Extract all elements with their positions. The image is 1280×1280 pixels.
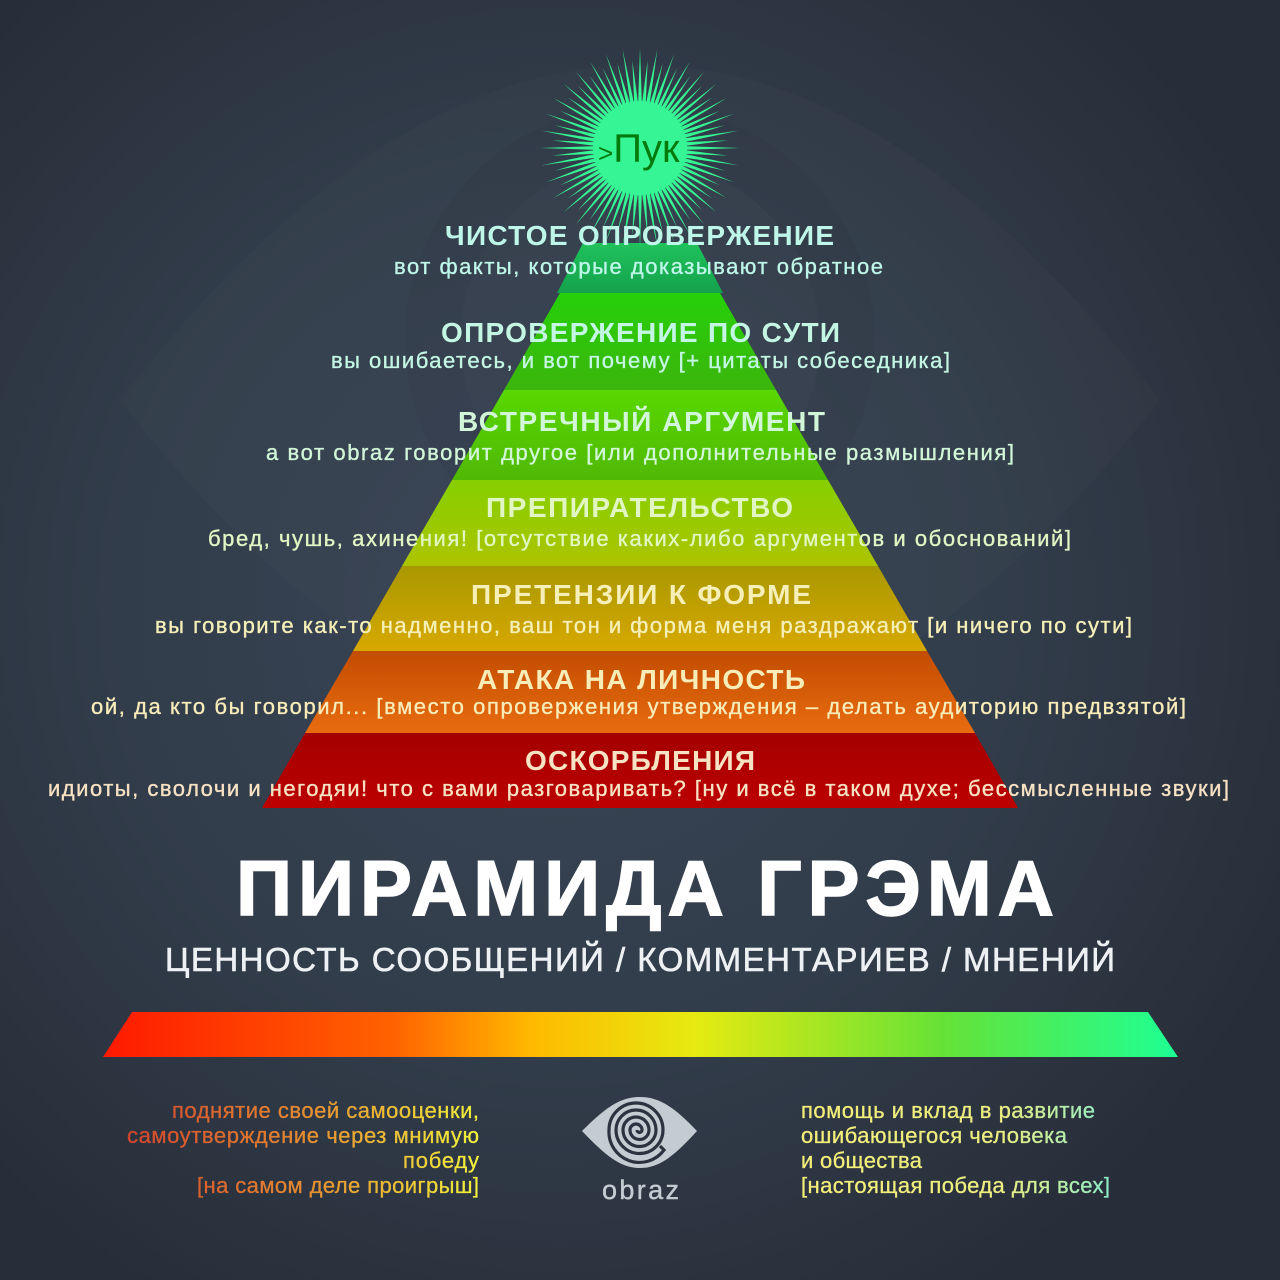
level 4 text [208,492,1071,551]
right note: ошибающегося человека [801,1123,1068,1148]
subtitle: ЦЕННОСТЬ СООБЩЕНИЙ / КОММЕНТАРИЕВ / МНЕНИЙ [165,941,1115,978]
level 1 text [394,220,883,279]
watermark: large eye behind the pyramid [120,65,1160,735]
level 5 text: ПРЕТЕНЗИИ К ФОРМЕ [471,579,811,610]
level 7 text [48,745,1229,801]
band: personal attack [305,651,975,733]
level 7 text: ОСКОРБЛЕНИЯ [525,745,755,776]
level 7 text: идиоты, сволочи и негодяи! что с вами разговаривать? [ну и всё в таком духе; бессмысленные звуки] [48,776,1229,801]
level 5 text [155,579,1132,638]
right note [801,1098,1110,1198]
band: refutation of the point [504,293,776,390]
level 2 text [331,317,950,373]
level 4 text: бред, чушь, ахинения! [отсутствие каких-либо аргументов и обоснований] [208,526,1071,551]
level 6 text [91,664,1186,719]
left note: самоутверждение через мнимую [127,1123,479,1148]
level 2 text: ОПРОВЕРЖЕНИЕ ПО СУТИ [441,317,840,348]
level 5 text: вы говорите как-то надменно, ваш тон и форма меня раздражают [и ничего по сути] [155,613,1132,638]
level 3 text: а вот obraz говорит другое [или дополнительные размышления] [266,440,1014,465]
left note: поднятие своей самооценки, [172,1098,479,1123]
level 1 text: ЧИСТОЕ ОПРОВЕРЖЕНИЕ [445,220,834,251]
band: insults [262,733,1018,808]
right note: и общества [801,1148,923,1173]
level 2 text: вы ошибаетесь, и вот почему [+ цитаты собеседника] [331,348,950,373]
level 3 text [266,405,1014,465]
title: ПИРАМИДА ГРЭМА [236,844,1054,932]
band: counterargument [452,390,828,480]
right note: [настоящая победа для всех] [801,1173,1110,1198]
right note: помощь и вклад в развитие [801,1098,1095,1123]
gradient scale bar [103,1012,1178,1057]
icon: sun burst at the apex [527,38,748,260]
level 4 text: ПРЕПИРАТЕЛЬСТВО [486,492,793,523]
left note: [на самом деле проигрыш] [197,1173,479,1198]
pyramid [262,243,1018,808]
left note [127,1098,479,1198]
band: contradiction [402,480,878,566]
band: form complaints [353,566,927,651]
logo: eye with spiral [582,1097,697,1168]
level 3 text: ВСТРЕЧНЫЙ АРГУМЕНТ [458,405,825,437]
level 6 text: ой, да кто бы говорил... [вместо опровержения утверждения – делать аудиторию предвзятой] [91,694,1186,719]
left note: победу [403,1148,479,1173]
apex label: >Пук [598,127,680,171]
band: clean refutation [557,243,723,293]
level 1 text: вот факты, которые доказывают обратное [394,254,883,279]
logo wordmark: obraz [602,1175,679,1205]
level 6 text: АТАКА НА ЛИЧНОСТЬ [477,664,805,695]
